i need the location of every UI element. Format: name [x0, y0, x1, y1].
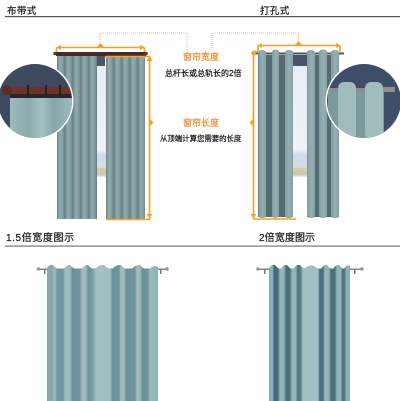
left curtain panel	[258, 50, 293, 218]
label: curtain width: 窗帘宽度	[183, 51, 219, 62]
left curtain panel	[57, 56, 97, 219]
curtain rod	[252, 52, 344, 54]
measurement: grommet width arrow	[212, 33, 340, 52]
heading: 布带式: 布带式	[7, 5, 37, 17]
curtain rod	[53, 52, 148, 56]
label: curtain width	[165, 51, 241, 78]
label: curtain length	[160, 117, 242, 143]
diagram: tape-top curtain	[53, 52, 148, 219]
inset: tape-top rod detail	[0, 62, 74, 140]
fabric	[269, 265, 350, 401]
window	[96, 66, 107, 219]
right curtain panel	[307, 50, 339, 218]
curtain: 1.5x width example	[37, 265, 169, 401]
curtain: 2x width example	[256, 265, 364, 401]
diagram: grommet curtain	[252, 50, 344, 219]
measurement: grommet length arrow	[250, 50, 296, 219]
heading: 2x width: 2倍宽度图示	[259, 231, 315, 244]
inset: grommet rod detail	[326, 62, 400, 141]
label: curtain length: 窗帘长度	[183, 117, 219, 128]
measurement: tape-top length arrow	[105, 56, 154, 220]
label: curtain width: 总杆长或总轨长的2倍	[165, 68, 241, 78]
rod	[256, 267, 364, 274]
measurement: tape-top width arrow	[56, 33, 187, 52]
right curtain panel	[106, 56, 145, 219]
rod	[37, 267, 169, 274]
label: curtain length: 从顶端计算您需要的长度	[160, 134, 242, 143]
heading: 1.5x width: 1.5倍宽度图示	[6, 231, 75, 244]
window	[293, 66, 307, 219]
heading: 打孔式: 打孔式	[260, 5, 290, 17]
fabric	[47, 265, 158, 401]
